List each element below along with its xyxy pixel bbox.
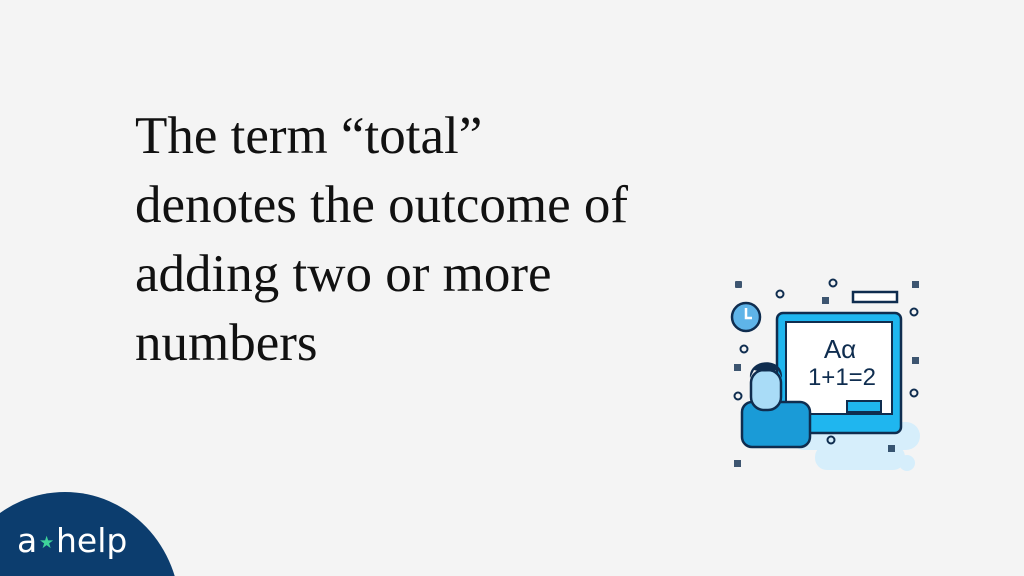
main text xyxy=(135,107,628,372)
main text: The term “total” xyxy=(135,107,482,165)
icon: teacher at board xyxy=(730,278,920,471)
board: Aα xyxy=(824,334,856,364)
board: 1+1=2 xyxy=(808,364,876,391)
logo xyxy=(0,492,175,576)
board xyxy=(777,313,901,433)
logo: help xyxy=(56,521,127,560)
clock xyxy=(732,303,760,331)
main text: adding two or more xyxy=(135,245,552,303)
cloud background xyxy=(790,422,920,471)
logo: a xyxy=(17,521,37,560)
eraser top xyxy=(853,292,897,302)
decorative dots xyxy=(734,280,918,444)
main text: denotes the outcome of xyxy=(135,176,628,234)
main text: numbers xyxy=(135,314,318,372)
logo: ★ xyxy=(39,533,54,553)
person xyxy=(742,362,810,447)
